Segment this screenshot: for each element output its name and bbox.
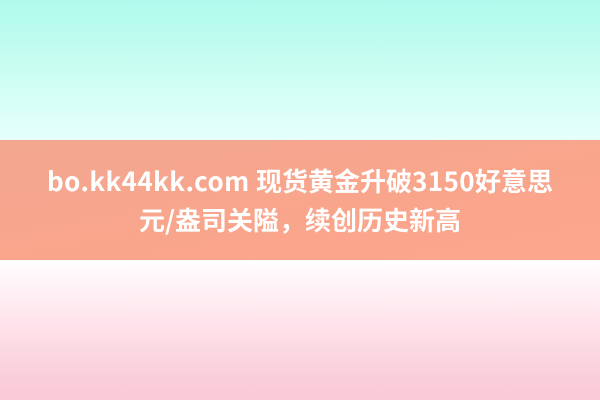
title line 1: bo.kk44kk.com 现货黄金升破3150好意思 — [47, 162, 553, 199]
title line 2: 元/盎司关隘，续创历史新高 — [139, 201, 461, 238]
title band — [0, 140, 600, 260]
